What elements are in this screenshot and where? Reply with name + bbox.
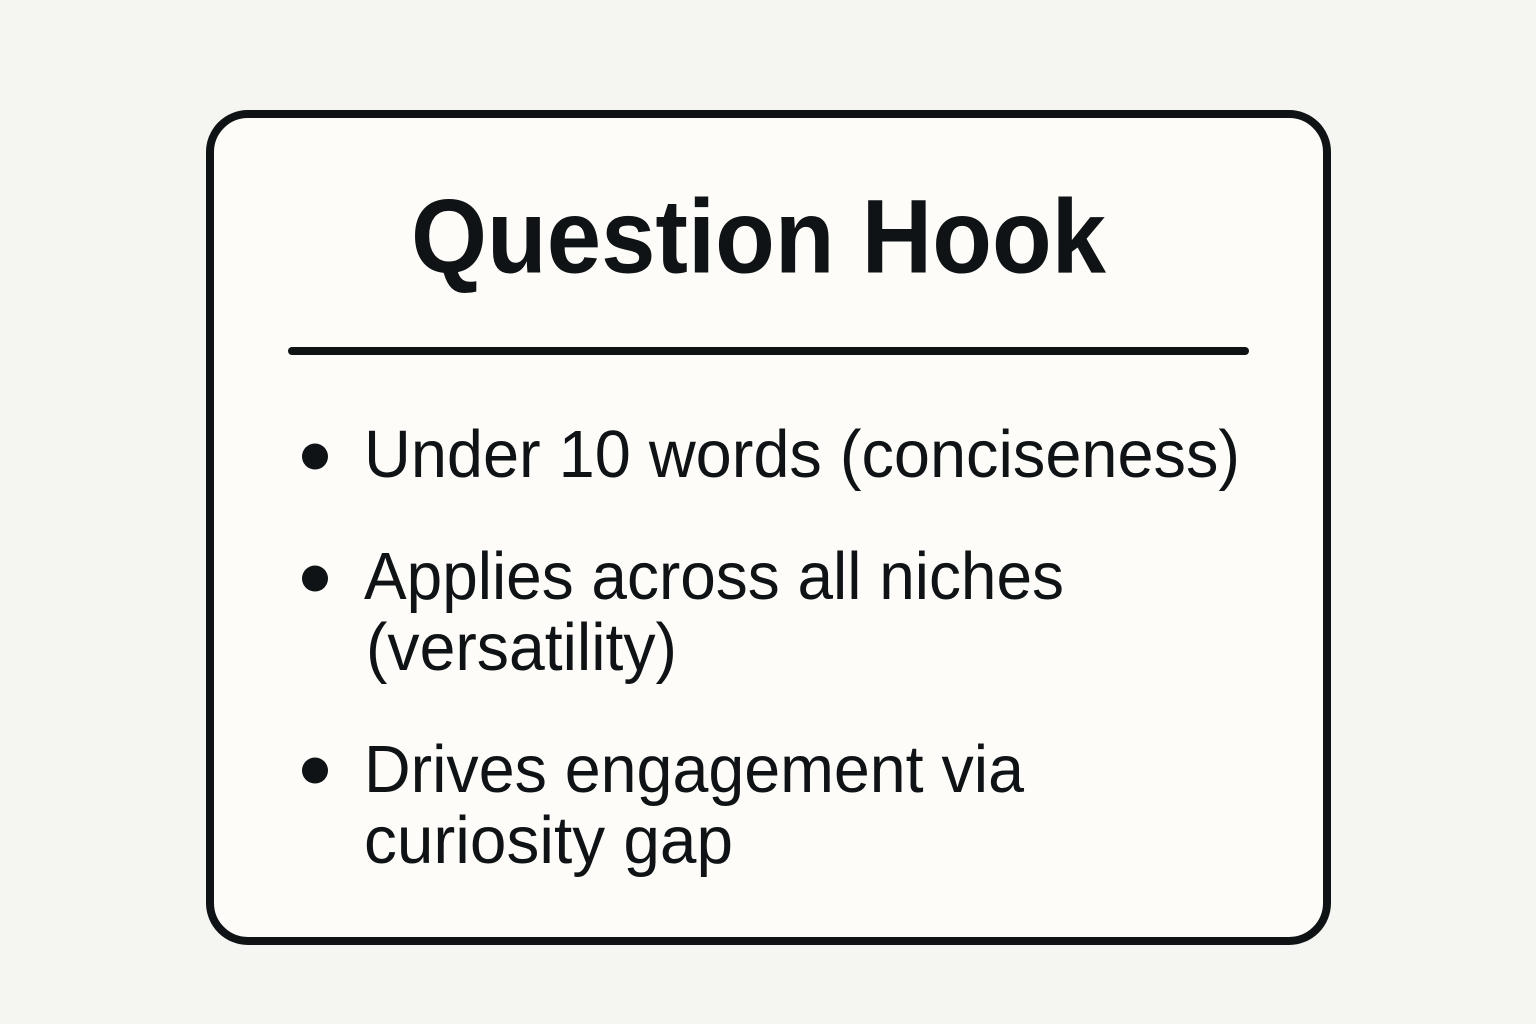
divider line (288, 347, 1249, 355)
bullet list (302, 417, 1240, 878)
bullet item: curiosity gap: Drives engagement via (364, 732, 1025, 807)
bullet item: versatility (302, 539, 1064, 685)
title: Question Hook (411, 178, 1107, 296)
bullet item: curiosity gap (302, 732, 1025, 878)
panel: question hook card (210, 114, 1327, 941)
bullet item: versatility: Applies across all niches (364, 539, 1064, 614)
bullet item: conciseness: Under 10 words (conciseness) (364, 417, 1240, 492)
bullet item: curiosity gap: curiosity gap (364, 803, 733, 878)
bullet item: versatility: (versatility) (366, 610, 677, 685)
